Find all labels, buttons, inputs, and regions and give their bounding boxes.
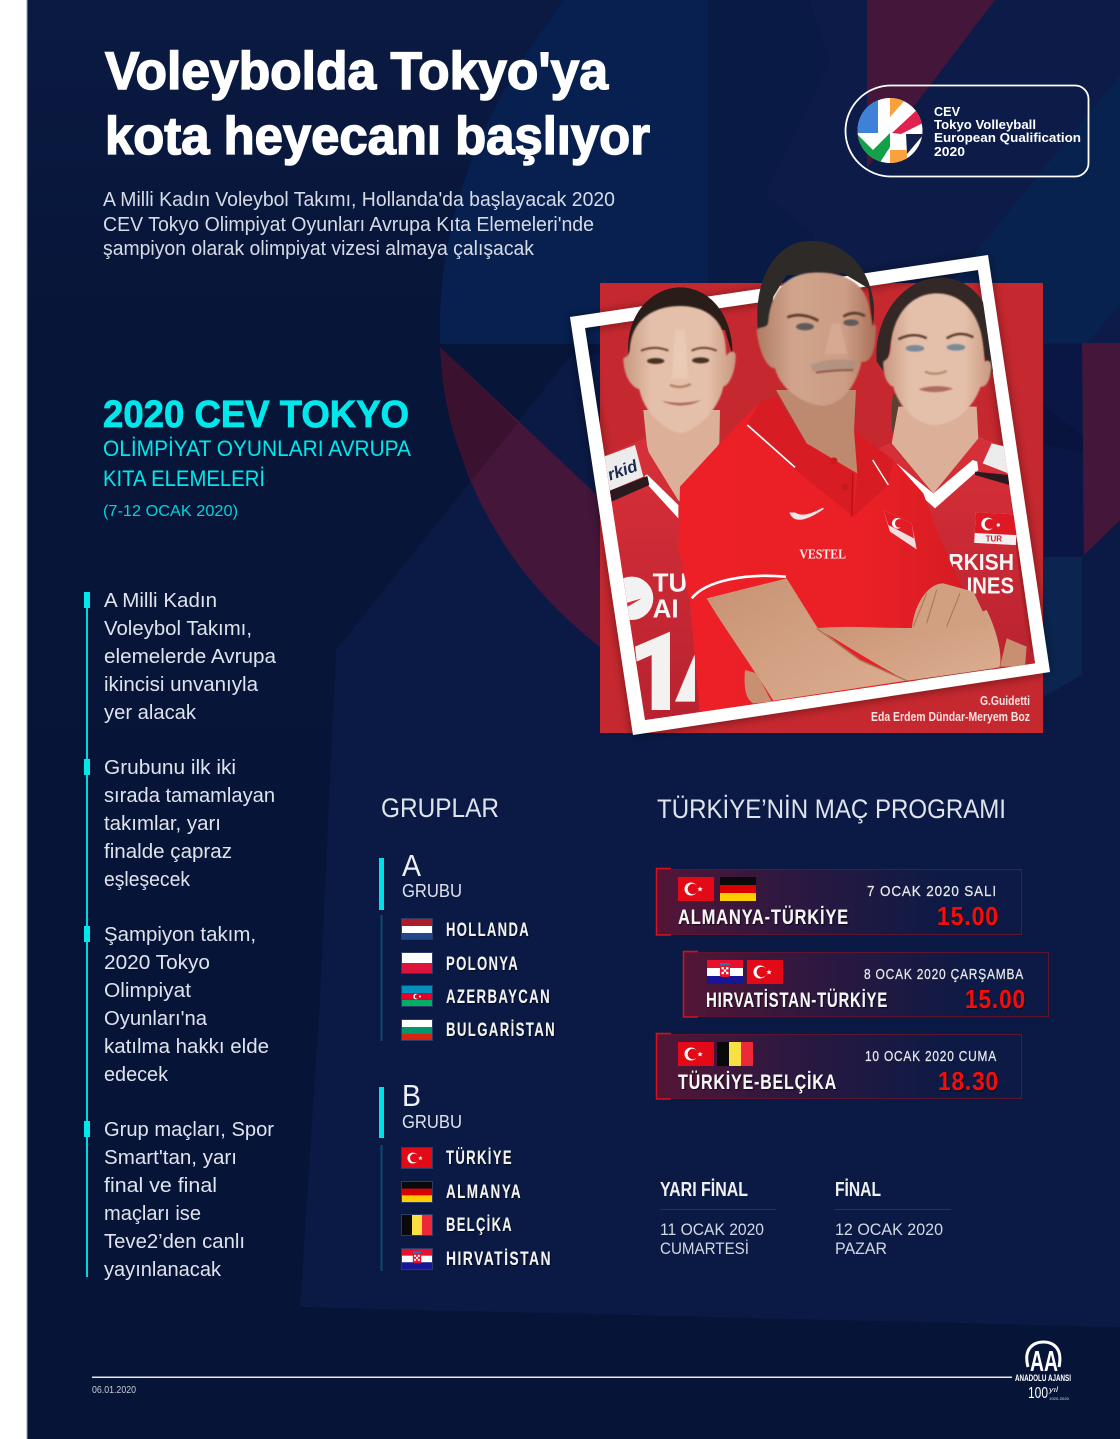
flag: Bulgaria xyxy=(401,1019,433,1041)
panel: key points list: elemelerde Avrupa xyxy=(104,646,277,668)
match card: Almanya-Türkiye xyxy=(656,868,1022,935)
shirt xyxy=(678,402,964,712)
match card: Hırvatistan-Türkiye: 15.00 xyxy=(965,984,1026,1014)
panel: key points list: Oyunları'na xyxy=(104,1008,208,1030)
heading: 2020 CEV Tokyo: OLİMPİYAT OYUNLARI AVRUPA xyxy=(103,436,411,461)
flag: Germany xyxy=(401,1181,433,1203)
photo caption xyxy=(871,693,1030,724)
panel: group A: BULGARİSTAN xyxy=(446,1020,556,1041)
panel: key points list: Teve2’den canlı xyxy=(104,1231,245,1253)
panel: key points list: Grubunu ilk iki xyxy=(104,757,236,779)
panel: key points list: A Milli Kadın xyxy=(104,590,217,612)
match card: Türkiye-Belçika: 18.30 xyxy=(938,1066,999,1096)
match card: Türkiye-Belçika: 10 OCAK 2020 CUMA xyxy=(865,1048,997,1065)
logo: Anadolu Ajansi: AA xyxy=(1030,1346,1058,1378)
logo: CEV Tokyo Volleyball European Qualification 2020: Tokyo Volleyball xyxy=(934,117,1036,132)
panel: key points list: Olimpiyat xyxy=(104,980,191,1002)
title xyxy=(105,42,650,166)
right player xyxy=(872,278,1040,673)
panel: team photo xyxy=(570,241,1050,735)
left player: TU xyxy=(653,568,687,598)
logo: CEV Tokyo Volleyball European Qualification 2020 xyxy=(846,86,1088,176)
panel: group A xyxy=(379,848,556,1041)
head xyxy=(757,241,874,333)
subtitle text block xyxy=(103,189,615,260)
heading: 2020 CEV Tokyo: KITA ELEMELERİ xyxy=(103,466,265,491)
panel: key points list: finalde çapraz xyxy=(104,841,232,863)
logo: CEV Tokyo Volleyball European Qualification 2020: CEV xyxy=(934,104,960,119)
flag: Netherlands xyxy=(401,918,433,940)
panel: group B: ALMANYA xyxy=(446,1182,522,1203)
panel: key points list: sırada tamamlayan xyxy=(104,785,275,807)
flag: Poland xyxy=(401,952,433,974)
arms xyxy=(707,578,907,701)
match card: Hırvatistan-Türkiye: HIRVATİSTAN-TÜRKİYE xyxy=(706,989,888,1012)
icon: tournament emblem xyxy=(857,98,925,164)
heading: 2020 CEV Tokyo: 2020 CEV TOKYO xyxy=(103,394,409,436)
panel: group B: B xyxy=(402,1078,421,1113)
panel: key points list: Şampiyon takım, xyxy=(104,924,256,946)
final date: PAZAR xyxy=(835,1239,887,1258)
match card: Türkiye-Belçika: TÜRKİYE-BELÇİKA xyxy=(678,1071,837,1094)
heading: match schedule: TÜRKİYE’NİN MAÇ PROGRAMI xyxy=(657,793,1006,824)
panel: key points list xyxy=(84,590,277,1281)
logo: Anadolu Ajansi: ANADOLU AJANSI xyxy=(1015,1373,1071,1383)
heading: 2020 CEV Tokyo xyxy=(103,394,411,520)
panel: group B xyxy=(379,1078,552,1271)
logo: Anadolu Ajansi: 1920-2020 xyxy=(1049,1396,1070,1401)
right player: RKISH xyxy=(948,549,1014,575)
photo caption: Eda Erdem Dündar-Meryem Boz xyxy=(871,709,1030,724)
panel: group A: HOLLANDA xyxy=(446,920,530,941)
panel: key points list: eşleşecek xyxy=(104,869,191,891)
top band with circle edge xyxy=(440,0,708,344)
match card: Almanya-Türkiye: ALMANYA-TÜRKİYE xyxy=(678,906,849,929)
subtitle text block: A Milli Kadın Voleybol Takımı, Hollanda'da başlayacak 2020 xyxy=(103,189,615,211)
match card: Almanya-Türkiye: 15.00 xyxy=(937,901,999,931)
panel: group B: GRUBU xyxy=(402,1112,462,1132)
subtitle text block: şampiyon olarak olimpiyat vizesi almaya çalışacak xyxy=(103,238,535,260)
logo: Anadolu Ajansi: yıl xyxy=(1048,1387,1059,1394)
panel: group B: HIRVATİSTAN xyxy=(446,1249,552,1270)
panel: group B: TÜRKİYE xyxy=(446,1148,513,1169)
large lighter polygon xyxy=(300,344,1120,1327)
logo: CEV Tokyo Volleyball European Qualification 2020: European Qualification xyxy=(934,130,1081,145)
match card: Türkiye-Belçika xyxy=(656,1034,1022,1099)
semi-final date: YARI FİNAL xyxy=(660,1178,748,1201)
flag: Croatia xyxy=(401,1248,433,1270)
panel: key points list: 2020 Tokyo xyxy=(104,952,210,974)
logo: Anadolu Ajansi xyxy=(1015,1342,1071,1402)
semi-final date: CUMARTESİ xyxy=(660,1239,749,1258)
panel: key points list: yer alacak xyxy=(104,702,197,724)
panel: key points list: Smart'tan, yarı xyxy=(104,1147,237,1169)
neck xyxy=(776,390,857,473)
photo frame xyxy=(570,255,1050,735)
panel: group A: A xyxy=(402,848,421,883)
heading: groups: GRUPLAR xyxy=(381,793,499,823)
panel: key points list: katılma hakkı elde xyxy=(104,1036,269,1058)
subtitle text block: CEV Tokyo Olimpiyat Oyunları Avrupa Kıta Elemeleri'nde xyxy=(103,214,594,236)
title: kota heyecanı başlıyor xyxy=(105,107,650,166)
logo: Anadolu Ajansi: 100 xyxy=(1028,1385,1048,1402)
coach: VESTEL xyxy=(799,547,846,562)
flag: Turkey xyxy=(401,1147,433,1169)
panel: key points list: ikincisi unvanıyla xyxy=(104,674,259,696)
left player: AI xyxy=(653,594,679,624)
flag: Belgium xyxy=(401,1214,433,1236)
panel: key points list: yayınlanacak xyxy=(104,1259,222,1281)
logo: CEV Tokyo Volleyball European Qualification 2020: 2020 xyxy=(934,144,965,159)
heading: 2020 CEV Tokyo: (7-12 OCAK 2020) xyxy=(103,503,238,520)
final date: FİNAL xyxy=(835,1178,881,1201)
final date xyxy=(835,1178,951,1258)
right player: INES xyxy=(967,572,1014,598)
match card: Hırvatistan-Türkiye: 8 OCAK 2020 ÇARŞAMBA xyxy=(864,966,1024,983)
semi-final date xyxy=(660,1178,776,1258)
panel: key points list: Voleybol Takımı, xyxy=(104,618,252,640)
panel: group A: GRUBU xyxy=(402,881,462,901)
panel: key points list: edecek xyxy=(104,1064,169,1086)
left player xyxy=(603,287,736,720)
panel: group B: BELÇİKA xyxy=(446,1215,513,1236)
photo caption: G.Guidetti xyxy=(980,693,1030,708)
title: Voleybolda Tokyo'ya xyxy=(105,42,609,101)
panel: key points list: final ve final xyxy=(104,1175,217,1197)
semi-final date: 11 OCAK 2020 xyxy=(660,1220,764,1239)
flag: Azerbaijan xyxy=(401,985,433,1007)
panel: group A: AZERBAYCAN xyxy=(446,987,551,1008)
coach xyxy=(678,241,1027,717)
match card: Almanya-Türkiye: 7 OCAK 2020 SALI xyxy=(867,883,997,900)
left player: rkid xyxy=(605,456,641,484)
panel: key points list: maçları ise xyxy=(104,1203,201,1225)
right player: TUR xyxy=(986,535,1002,544)
final date: 12 OCAK 2020 xyxy=(835,1220,943,1239)
footer date and rule: 06.01.2020 xyxy=(92,1385,136,1396)
panel: group A: POLONYA xyxy=(446,954,519,975)
match card: Hırvatistan-Türkiye xyxy=(684,952,1048,1017)
panel: key points list: takımlar, yarı xyxy=(104,813,221,835)
panel: key points list: Grup maçları, Spor xyxy=(104,1119,274,1141)
maroon shapes xyxy=(867,0,995,168)
